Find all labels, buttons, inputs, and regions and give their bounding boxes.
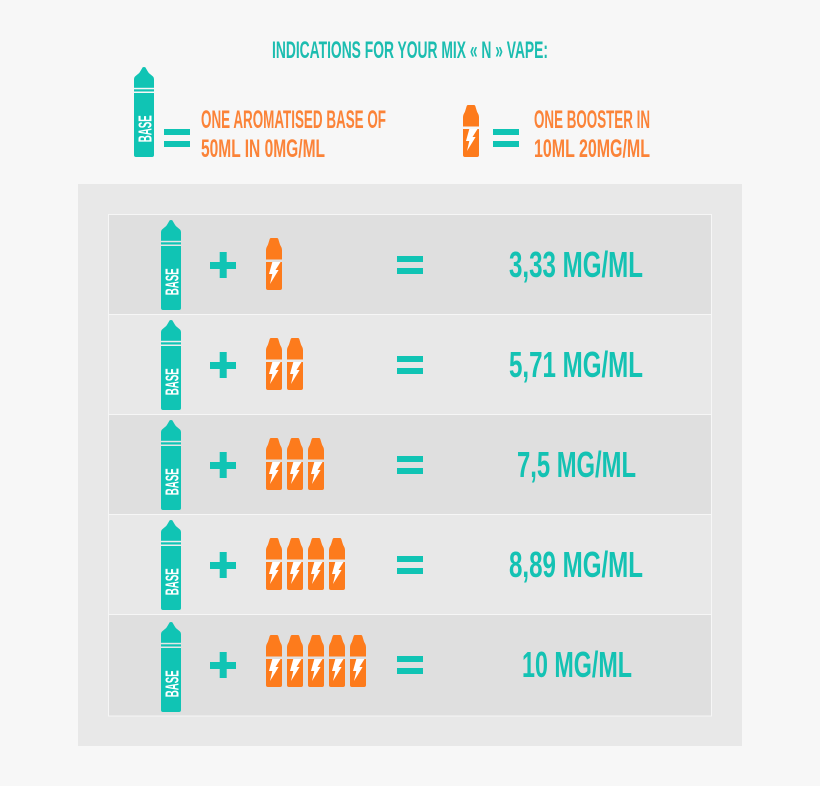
icons: boosters [266,338,303,390]
result: 3,33 MG/ML [509,244,643,285]
icon: base bottle [161,622,182,712]
icon: equals [397,656,423,674]
icon: base bottle [161,220,182,310]
icon: base bottle: BASE [161,670,182,697]
icon: plus [210,652,236,678]
row: 3 boosters [109,415,711,514]
icon: equals [397,356,423,374]
icon: base bottle [161,420,182,510]
panel: mix table [78,184,742,746]
row: 5 boosters [109,615,711,716]
result: 7,5 MG/ML [517,444,636,485]
icon: plus [210,252,236,278]
icon: base bottle: BASE [134,115,155,142]
icons: boosters [266,438,324,490]
icon: equals [397,456,423,474]
icon: equals [164,129,190,147]
icon: equals [397,256,423,274]
legend text: booster: 10ML 20MG/ML [534,135,650,163]
icon: equals [493,129,519,147]
result: 8,89 MG/ML [509,544,643,585]
legend: booster [463,105,650,163]
icon: plus [210,452,236,478]
icons: boosters [266,635,366,687]
row: 4 boosters [109,515,711,614]
row: 2 boosters [109,315,711,414]
icon: base bottle: BASE [161,468,182,495]
icon: base bottle [161,520,182,610]
title: INDICATIONS FOR YOUR MIX « N » VAPE: [272,37,548,64]
icon: base bottle: BASE [161,268,182,295]
icon: base bottle [161,320,182,410]
icon: plus [210,352,236,378]
legend text: base [201,106,386,163]
icon: equals [397,556,423,574]
legend text: base: 50ML IN 0MG/ML [201,135,325,163]
legend text: booster: ONE BOOSTER IN [534,106,650,134]
icons: boosters [266,538,345,590]
icon: base bottle: BASE [161,368,182,395]
legend text: booster [534,106,650,163]
icon: booster bottle [463,105,479,157]
result: 10 MG/ML [522,644,632,685]
icon: plus [210,552,236,578]
legend: aromatised base [134,67,386,163]
row: 1 booster [109,215,711,314]
result: 5,71 MG/ML [509,344,643,385]
icon: booster [266,238,282,290]
icon: base bottle: BASE [161,568,182,595]
icon: base bottle [134,67,155,157]
legend text: base: ONE AROMATISED BASE OF [201,106,386,134]
